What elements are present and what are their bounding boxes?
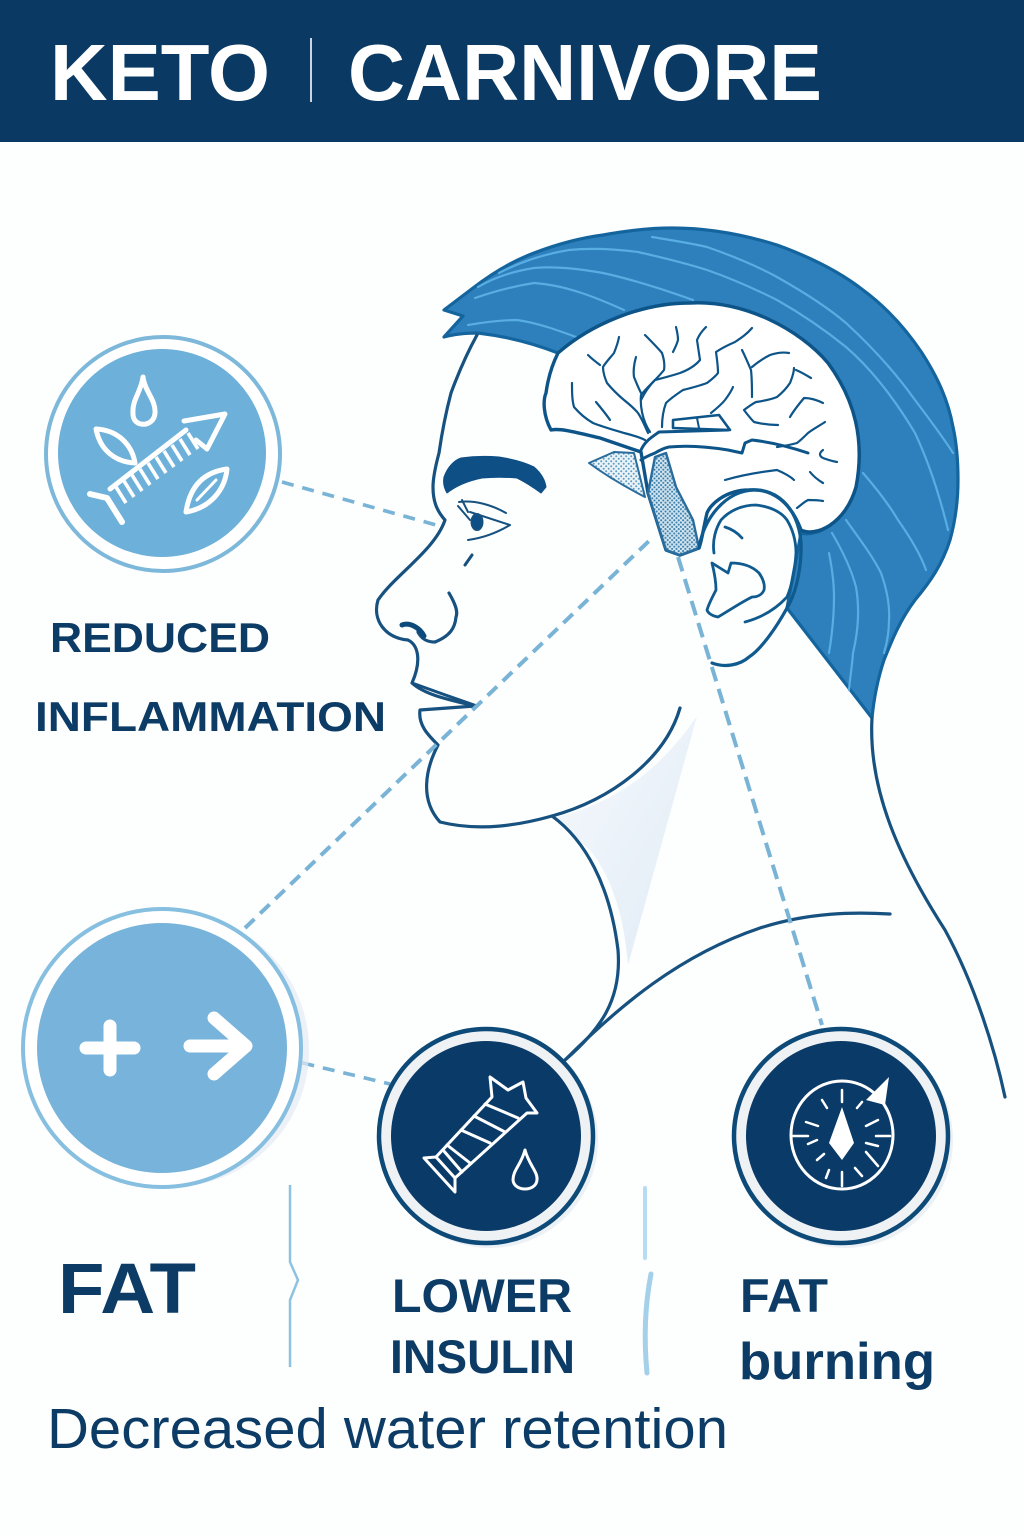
dashed connector: left circle to insulin (282, 1058, 390, 1084)
eye (458, 500, 510, 565)
divider: left (290, 1185, 298, 1367)
eyebrow (444, 456, 546, 493)
label: fat burning: FAT (740, 1269, 828, 1322)
dashed connector: ear to fat burning (678, 557, 822, 1025)
neck (552, 816, 618, 1060)
icon: arrow (190, 1018, 246, 1074)
hair (444, 228, 958, 718)
header banner (0, 0, 1024, 142)
label: fat: FAT (58, 1250, 196, 1329)
brain stem and speckled region (589, 452, 699, 555)
brain (544, 303, 859, 555)
badge: reduced inflammation (46, 337, 280, 571)
icon: arrow comb (184, 414, 225, 449)
label: lower insulin: LOWER (392, 1269, 572, 1322)
icon: wrapped bar (424, 1077, 537, 1192)
dashed connector: top circle to eye (282, 482, 436, 525)
head illustration (377, 228, 1005, 1097)
neck shadow (552, 716, 697, 965)
icon: gauge (791, 1077, 893, 1189)
label: reduced inflammation (35, 614, 386, 740)
back of neck (872, 718, 1005, 1097)
icon: water drop (513, 1150, 537, 1189)
divider: right bottom (645, 1274, 651, 1373)
badge: lower insulin (379, 1029, 598, 1248)
title divider (310, 38, 312, 102)
icon: leaf right (186, 469, 227, 512)
icon: plus (86, 1026, 134, 1070)
label: fat burning (739, 1269, 935, 1391)
badge: fat burning (734, 1029, 953, 1248)
nostril (418, 593, 457, 642)
caption: decreased water retention: Decreased water retention (47, 1397, 728, 1461)
hair highlights (468, 237, 953, 690)
badge: fat plus arrow (23, 909, 309, 1187)
label: reduced inflammation: REDUCED (50, 614, 270, 661)
shoulder (565, 913, 890, 1060)
title: carnivore: CARNIVORE (348, 28, 822, 117)
divider: right top (643, 1188, 647, 1258)
dashed connector: left circle to ear (245, 540, 650, 928)
ear (699, 490, 801, 665)
face profile (377, 335, 680, 827)
label: fat burning: burning (739, 1333, 935, 1391)
icon: water drop (133, 377, 155, 424)
icon: leaf left (96, 429, 135, 463)
label: lower insulin (390, 1269, 575, 1383)
label: reduced inflammation: INFLAMMATION (35, 693, 386, 740)
label: lower insulin: INSULIN (390, 1330, 575, 1383)
title: keto: KETO (50, 28, 270, 117)
mouth line (412, 683, 477, 706)
